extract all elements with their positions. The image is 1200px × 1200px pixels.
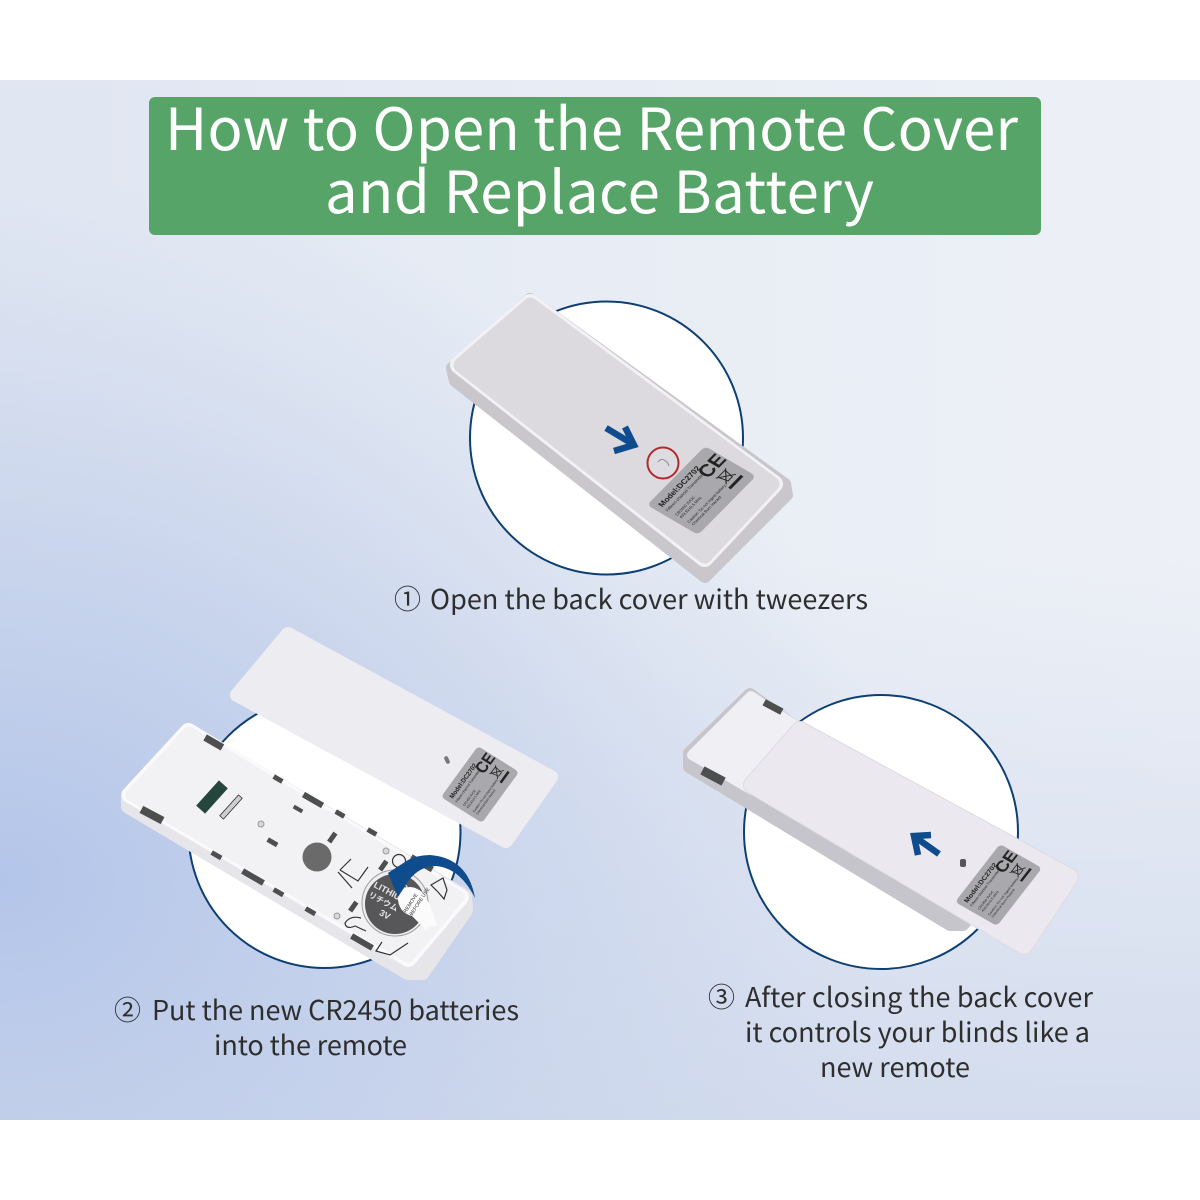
step 1 caption: ① <box>394 578 421 617</box>
step 2 product label: CR2450 3VDC <box>462 788 478 807</box>
step 1 product label: CR2450 3VDC <box>674 495 697 516</box>
title banner: and Replace Battery <box>325 146 874 230</box>
step 3 product label: 433.92±0.5 MHz <box>981 890 1000 913</box>
tweezer slot marker <box>648 448 678 478</box>
step 3 product label: CR2450 3VDC <box>977 890 995 910</box>
step 3 caption: After closing the back cover <box>745 976 1094 1015</box>
step 2 product label: Chemical Burn Hazard <box>475 788 497 815</box>
step 3 product label: Model:DC2702 <box>963 862 999 904</box>
step 3 product label: Chemical Burn Hazard <box>991 888 1016 918</box>
step 2 caption: Put the new CR2450 batteries <box>152 989 519 1028</box>
screw holes <box>258 821 389 919</box>
step 2 circle <box>188 696 460 968</box>
step 3 circle <box>744 695 1018 969</box>
step 2 curved arrow <box>388 855 475 898</box>
step 1 remote back view <box>452 299 787 577</box>
step 3 product label <box>955 844 1042 926</box>
step 1 caption: Open the back cover with tweezers <box>430 578 868 617</box>
CR2450 battery: REMOVE <box>403 892 420 914</box>
title banner: How to Open the Remote Cover <box>165 83 1018 167</box>
step 1 product label: Chemical Burn Hazard <box>690 495 722 526</box>
step 3 caption: it controls your blinds like a <box>745 1011 1090 1050</box>
battery pull tab <box>398 887 437 929</box>
step 1 circle <box>470 302 743 574</box>
step 2 product label <box>441 746 519 823</box>
step 3 product label: Caution: Do not ingest battery, <box>987 877 1020 916</box>
step 2 caption: into the remote <box>214 1024 407 1063</box>
step 1 product label <box>647 446 756 535</box>
CR2450 battery <box>362 870 437 936</box>
step 1 product label: Model:DC2702 <box>656 464 703 508</box>
step 3 caption <box>708 976 1094 1085</box>
title banner <box>149 83 1041 235</box>
step 2 caption: ② <box>114 989 141 1028</box>
dark clips and slots <box>140 734 434 951</box>
step 2 product label: Fifteen-channel Transmitter <box>454 768 482 803</box>
step 2 caption <box>114 989 519 1063</box>
step 3 caption: ③ <box>708 976 735 1015</box>
cover slot <box>960 859 966 867</box>
CR2450 battery: CR <box>393 878 410 894</box>
CR2450 battery: 3V <box>378 908 392 922</box>
contact outlines <box>338 854 447 955</box>
step 3 product label: Fifteen-channel Transmitter <box>969 868 1002 907</box>
CR2450 battery: リチウム <box>366 889 400 914</box>
step 2 product label: Model:DC2702 <box>448 762 479 800</box>
step 1 product label: 433.92±0.5 MHz <box>678 496 703 519</box>
step 1 product label: CE <box>693 451 732 482</box>
step 1 product label: Caution: Do not ingest battery, <box>686 483 728 524</box>
sliding cover <box>752 730 1070 946</box>
centre screw post <box>302 842 332 872</box>
sliding cover shadow edge <box>752 730 1070 946</box>
step 3 product label: CE <box>991 848 1022 876</box>
cover slot <box>443 756 451 764</box>
CR2450 battery: LITHIUM <box>372 880 409 906</box>
step 2 product label: 433.92±0.5 MHz <box>465 789 482 809</box>
board connector <box>196 780 242 819</box>
step 3 direction arrow <box>914 835 939 855</box>
step 3 closing remote <box>689 694 1070 946</box>
CR2450 battery: BEFORE USE <box>409 886 432 917</box>
step 3 caption: new remote <box>820 1046 970 1085</box>
step 2 open remote body <box>129 731 475 972</box>
step 1 product label: Fifteen-channel Transmitter <box>664 472 706 512</box>
step 1 direction arrow <box>606 427 634 451</box>
step 2 product label: CE <box>472 750 499 777</box>
remote clips <box>700 699 783 786</box>
step 2 product label: Caution: Do not ingest battery, <box>472 778 499 813</box>
step 2 removed cover <box>237 634 551 841</box>
